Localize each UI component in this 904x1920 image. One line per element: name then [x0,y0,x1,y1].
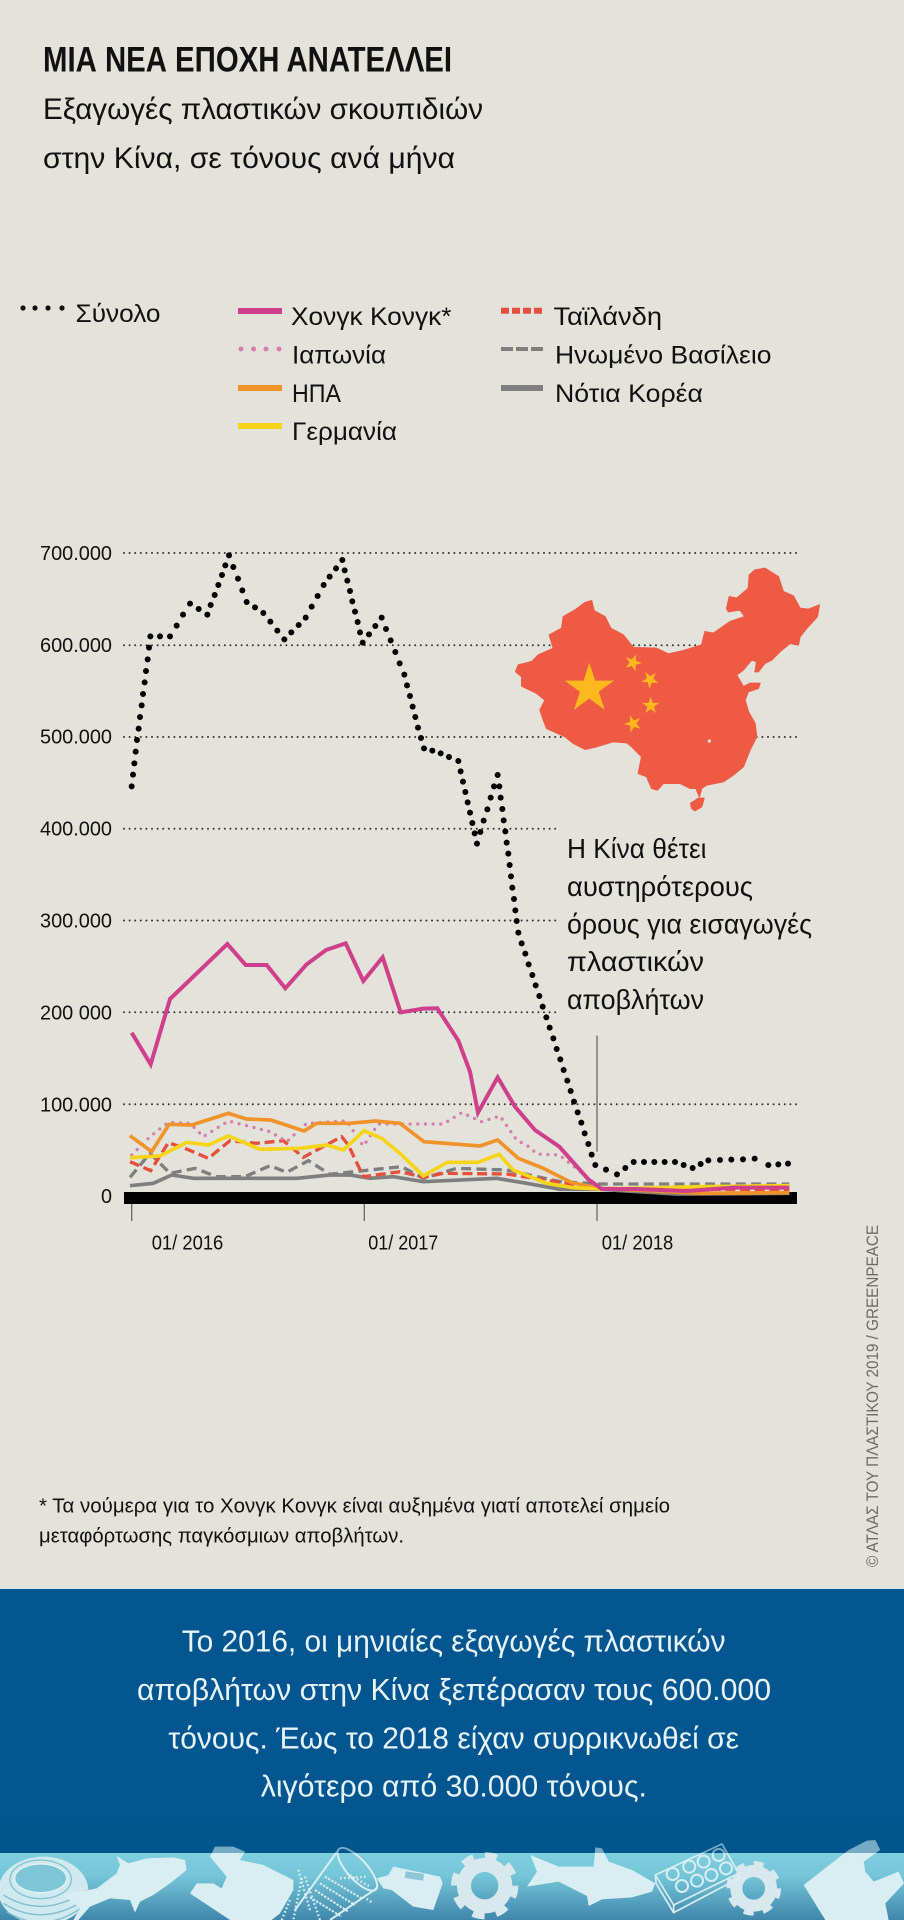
icon: fish [63,1856,187,1920]
x axis date labels: 01/ 2017 [368,1231,438,1254]
y axis labels: 400.000 [40,818,112,840]
panel: blue summary [0,1588,904,1854]
series: Germany [130,1131,789,1189]
icon: tin can [282,1842,383,1920]
legend item: USA: ΗΠΑ [292,380,341,408]
panel: blue summary: Το 2016, οι μηνιαίες εξαγωγές πλαστικών [182,1625,725,1659]
legend item: Thailand: Ταϊλάνδη [554,303,662,331]
y axis labels: 600.000 [40,634,112,657]
callout: China sets stricter terms: Η Κίνα θέτει [567,833,706,864]
y axis labels: 700.000 [40,542,112,565]
x axis date labels: 01/ 2018 [602,1231,673,1254]
legend item: total [20,300,161,328]
subtitle [43,93,483,175]
callout leader line [596,1036,598,1152]
callout: China sets stricter terms: αυστηρότερους [567,871,753,902]
legend item: South Korea [501,380,703,408]
footnote: μεταφόρτωσης παγκόσμιων αποβλήτων. [39,1526,404,1548]
callout: China sets stricter terms [567,833,812,1015]
x axis ticks [132,1204,597,1221]
callout: China sets stricter terms: πλαστικών [567,946,704,977]
icon: bottle [377,1867,443,1910]
y axis labels: 0 [101,1185,112,1208]
callout: China sets stricter terms: αποβλήτων [567,984,704,1015]
x axis baseline bar [124,1192,797,1204]
legend item: Germany: Γερμανία [292,418,397,446]
subtitle: στην Κίνα, σε τόνους ανά μήνα [43,142,455,175]
panel: blue summary: αποβλήτων στην Κίνα ξεπέρασαν τους 600.000 [137,1673,771,1707]
series: Thailand [130,1137,789,1190]
legend item: Hong Kong: Χονγκ Κονγκ* [291,303,452,331]
series: South Korea [130,1175,789,1194]
title: ΜΙΑ ΝΕΑ ΕΠΟΧΗ ΑΝΑΤΕΛΛΕΙ [43,41,452,80]
icon: tyre [0,1857,88,1920]
series: USA [130,1113,789,1193]
panel: blue summary: λιγότερο από 30.000 τόνους. [261,1770,647,1804]
icon: lego brick [655,1844,739,1913]
icon: second gear [730,1864,778,1912]
subtitle: Εξαγωγές πλαστικών σκουπιδιών [43,93,483,126]
icons left half [0,1842,443,1920]
decorative strip: sea with plastic waste [0,1820,904,1920]
series: United Kingdom [130,1153,789,1184]
legend item: Germany [238,418,397,446]
panel: blue summary: τόνους. Έως το 2018 είχαν συρρικνωθεί σε [168,1721,739,1755]
y axis labels: 500.000 [40,726,112,748]
credit: © ΑΤΛΑΣ ΤΟΥ ΠΛΑΣΤΙΚΟΥ 2019 / GREENPEACE [863,1225,882,1567]
x axis date labels [152,1231,673,1254]
x axis date labels: 01/ 2016 [152,1231,223,1254]
y axis labels: 100.000 [40,1093,112,1116]
icons right half [455,1840,904,1920]
line chart: country series [130,943,789,1194]
y axis labels [40,542,112,1208]
legend item: Japan: Ιαπωνία [292,342,386,370]
icon: plastic bag [804,1840,904,1920]
y axis labels: 200 000 [40,1001,112,1024]
series: Japan [132,1113,600,1188]
legend item: Japan [238,342,386,370]
footnote: * Τα νούμερα για το Χονγκ Κονγκ είναι αυξημένα γιατί αποτελεί σημείο [39,1496,670,1518]
y axis labels: 300.000 [40,910,112,932]
legend item: USA [238,380,341,408]
icon: fish [527,1847,655,1906]
footnote [39,1496,670,1548]
legend item: South Korea: Νότια Κορέα [555,380,703,408]
series: Hong Kong [132,943,789,1191]
callout: China sets stricter terms: όρους για εισαγωγές [567,908,812,940]
legend item: total: Σύνολο [76,300,160,328]
icon: gear [455,1856,515,1916]
series: total (dotted) [132,555,788,1174]
icon: plastic bag [190,1847,293,1920]
map of China with flag stars [516,568,819,811]
legend [20,300,771,446]
legend item: United Kingdom: Ηνωμένο Βασίλειο [555,342,772,370]
